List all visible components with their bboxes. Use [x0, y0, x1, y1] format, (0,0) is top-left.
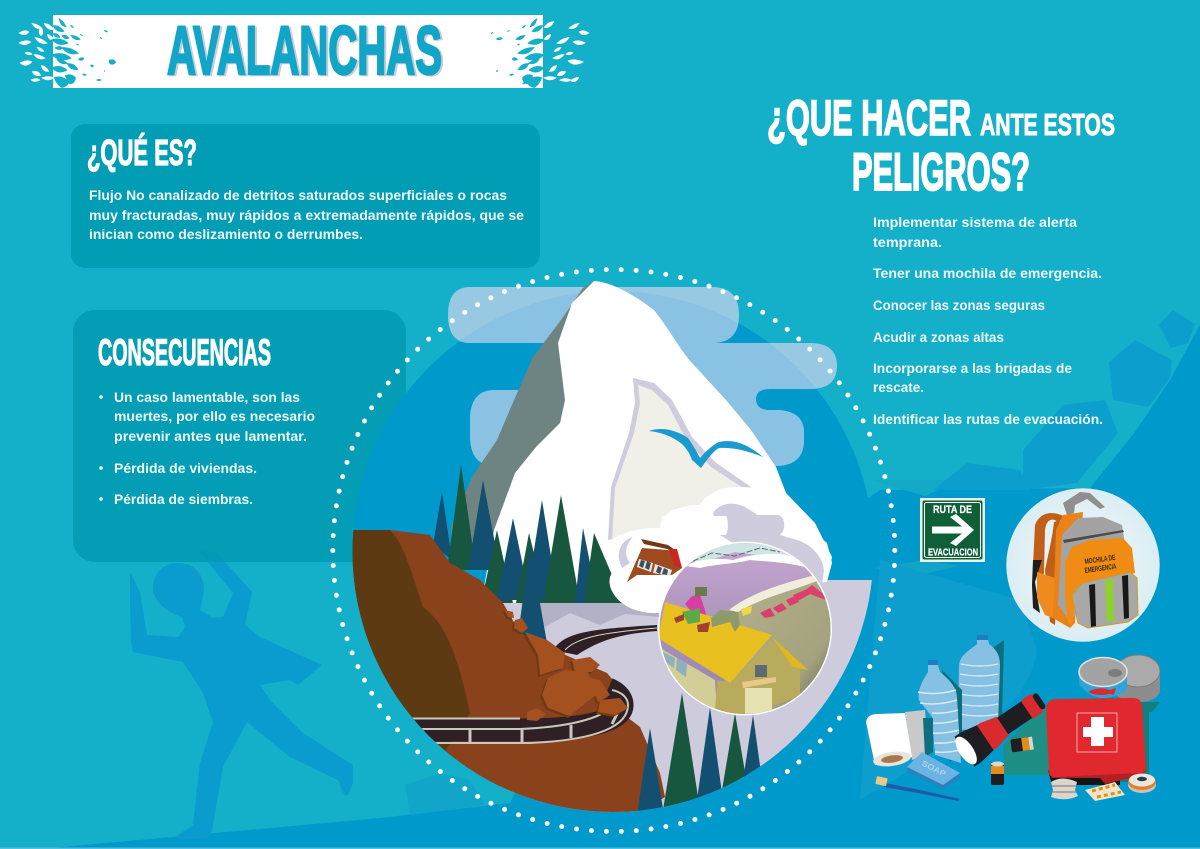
panel: que es: [71, 124, 540, 268]
blue circle: [352, 291, 874, 812]
illustration: mountain scene: [345, 281, 880, 820]
toothbrush: [884, 783, 960, 801]
title banner: [20, 12, 588, 90]
emergency kit items: [866, 635, 1160, 801]
straps: [1033, 513, 1065, 580]
heading: que es: ¿QUÉ ES?: [87, 132, 197, 173]
list: consequences: Pérdida de siembras.: [114, 491, 253, 507]
list: actions: Tener una mochila de emergencia.: [873, 265, 1102, 281]
first aid kit: [1046, 698, 1149, 785]
toilet roll: [866, 710, 933, 769]
text: definition: muy fracturadas, muy rápidos a extremadamente rápidos, que se: [89, 207, 524, 223]
list: actions: Acudir a zonas altas: [873, 329, 1004, 345]
mountain: [451, 281, 832, 610]
heading: que hacer: ANTE ESTOS: [980, 107, 1115, 142]
heading: que hacer: PELIGROS?: [852, 143, 1030, 202]
list: actions: Incorporarse a las brigadas de: [873, 360, 1072, 376]
text: definition: [89, 187, 524, 242]
bandages and pills: [1051, 774, 1156, 801]
side pocket: [1037, 572, 1055, 618]
back trees: [433, 465, 624, 643]
flying chalet: [627, 539, 682, 582]
snow cloud: [607, 487, 832, 613]
inset: people on roof: [655, 540, 840, 720]
icon: emergency backpack: MOCHILA DE: [1084, 553, 1116, 566]
heading: que hacer: [767, 90, 1115, 202]
panel: consecuencias: [73, 310, 406, 562]
list: consequences: Un caso lamentable, son las: [114, 389, 300, 405]
heading: consecuencias: CONSECUENCIAS: [98, 332, 271, 373]
banner shards right: [491, 20, 588, 87]
list: actions: [873, 214, 1103, 427]
icon: evacuation route sign: RUTA DE: [933, 504, 972, 516]
list: consequences: Pérdida de viviendas.: [114, 460, 257, 476]
background rocks: [339, 310, 1195, 815]
ground: [500, 580, 880, 820]
bird: [649, 429, 763, 468]
soap: [907, 752, 960, 789]
list: consequences: [99, 389, 315, 507]
flashlight: [950, 685, 1052, 769]
title text: [167, 12, 444, 90]
floor shadow: [1003, 710, 1050, 775]
icon: emergency backpack: [1006, 488, 1160, 642]
front pocket: [1065, 538, 1135, 625]
batteries: [991, 737, 1034, 785]
title text: AVALANCHAS: [167, 12, 442, 89]
silhouette: person fleeing: [130, 550, 353, 840]
list: consequences: muertes, por ello es necesario: [114, 408, 315, 424]
food cans: [1079, 655, 1160, 712]
dotted ring: [333, 270, 895, 832]
soap: SOAP: [920, 759, 948, 779]
body: [1053, 512, 1083, 628]
icon: evacuation route sign: EVACUACION: [928, 548, 978, 558]
rocks: [503, 610, 628, 721]
text: definition: Flujo No canalizado de detritos saturados superficiales o rocas: [89, 187, 507, 203]
banner shards left: [20, 20, 116, 87]
clouds: [448, 287, 837, 466]
water bottles: [918, 635, 1004, 763]
black side strap: [1032, 560, 1042, 613]
title text: AVALANCHAS: [169, 13, 444, 90]
list: consequences: prevenir antes que lamentar.: [114, 428, 307, 444]
lower pocket: [1072, 572, 1138, 628]
handle: [1063, 492, 1105, 515]
text: definition: inician como deslizamiento o derrumbes.: [89, 226, 363, 242]
list: actions: Implementar sistema de alerta: [873, 214, 1077, 230]
list: actions: temprana.: [873, 234, 942, 250]
icon: emergency backpack: EMERGENCIA: [1084, 562, 1117, 575]
hillside: [345, 530, 665, 815]
road: [400, 625, 657, 744]
list: actions: Conocer las zonas seguras: [873, 297, 1045, 313]
icon: evacuation route sign: [920, 498, 985, 562]
heading: que hacer: ¿QUE HACER: [767, 90, 971, 146]
list: actions: Identificar las rutas de evacuación.: [873, 411, 1103, 427]
front trees: [637, 693, 762, 815]
list: actions: rescate.: [873, 379, 924, 395]
